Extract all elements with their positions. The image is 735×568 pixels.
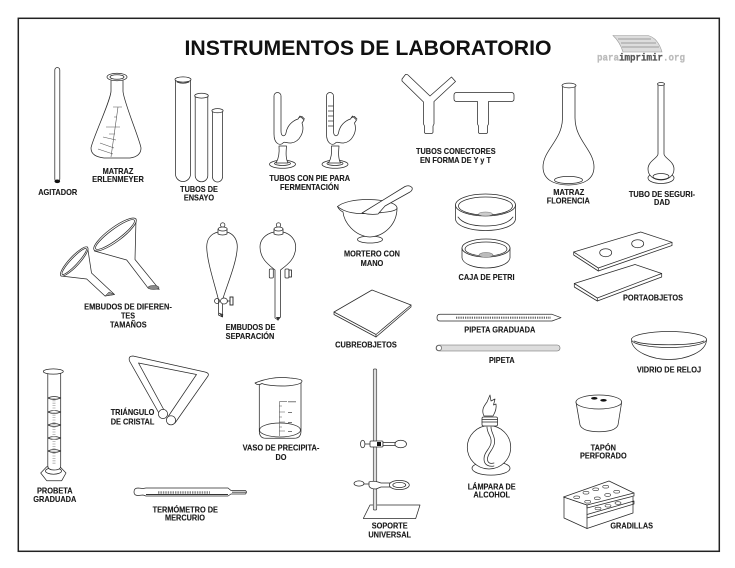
icon: glass triangle bbox=[129, 356, 208, 425]
label: TUBO DE SEGURI- bbox=[629, 189, 695, 199]
icon: thermometer bbox=[134, 488, 246, 496]
label: FLORENCIA bbox=[547, 196, 590, 206]
label: PIPETA GRADUADA bbox=[464, 324, 535, 334]
label: MERCURIO bbox=[165, 513, 205, 523]
icon: test tube rack bbox=[564, 481, 634, 528]
icon: concave slide bbox=[574, 232, 672, 271]
label bbox=[226, 322, 276, 341]
icon: large petri dish bbox=[456, 194, 516, 230]
label: TERMÓMETRO DE bbox=[153, 503, 218, 514]
icon: pipette bbox=[436, 345, 560, 351]
icon: stirring rod bbox=[54, 68, 60, 183]
label bbox=[344, 249, 400, 268]
label bbox=[368, 520, 411, 539]
icon: test tubes bbox=[175, 77, 223, 182]
instrument: agitador bbox=[38, 68, 77, 197]
label: TRIÁNGULO bbox=[111, 407, 155, 417]
label: MORTERO CON bbox=[344, 249, 400, 259]
label: ERLENMEYER bbox=[92, 174, 144, 184]
label: EMBUDOS DE bbox=[226, 322, 276, 332]
instrument: pipeta bbox=[436, 345, 560, 365]
icon: globe separatory funnel bbox=[260, 223, 296, 321]
instrument: matraz florencia bbox=[543, 83, 594, 206]
label: VIDRIO DE RELOJ bbox=[637, 365, 701, 375]
instrument: soporte universal bbox=[354, 369, 420, 539]
icon: pear separatory funnel bbox=[207, 223, 237, 317]
instrument: tubo de seguridad bbox=[629, 82, 695, 207]
label: EMBUDOS DE DIFEREN- bbox=[84, 301, 172, 311]
instrument: gradillas bbox=[564, 481, 653, 530]
label: VASO DE PRECIPITA- bbox=[243, 443, 319, 453]
icon: retort stand bbox=[354, 369, 420, 518]
instrument: triangulo de cristal bbox=[111, 356, 208, 426]
label: TUBOS DE bbox=[180, 184, 218, 194]
instrument: vaso de precipitado bbox=[243, 378, 319, 462]
icon: T connector bbox=[454, 92, 514, 134]
label: FERMENTACIÓN bbox=[280, 181, 339, 192]
label bbox=[180, 184, 218, 202]
label bbox=[33, 486, 76, 504]
instrument: lampara de alcohol bbox=[467, 395, 516, 500]
instrument: matraz erlenmeyer bbox=[91, 73, 144, 184]
logo: paraimprimir.org bbox=[597, 36, 685, 64]
instrument: termometro de mercurio bbox=[134, 488, 246, 523]
instrument: pipeta graduada bbox=[437, 314, 561, 334]
label: PERFORADO bbox=[580, 451, 627, 461]
label: DE CRISTAL bbox=[111, 416, 154, 426]
label: PIPETA bbox=[489, 355, 515, 365]
icon: fermentation tube plain bbox=[270, 93, 304, 168]
label bbox=[629, 189, 695, 207]
icon: perforated stopper bbox=[576, 395, 622, 432]
instrument: cubreobjetos bbox=[334, 290, 411, 350]
label: DAD bbox=[654, 197, 670, 207]
icon: erlenmeyer flask bbox=[91, 73, 141, 158]
label: AGITADOR bbox=[38, 187, 77, 197]
icon: safety tube bbox=[648, 82, 674, 184]
label: GRADUADA bbox=[33, 494, 76, 504]
label: MATRAZ bbox=[553, 187, 584, 197]
instrument: embudos bbox=[57, 213, 172, 329]
instrument: vidrio de reloj bbox=[632, 332, 706, 375]
label: SOPORTE bbox=[372, 520, 408, 530]
icon: beaker bbox=[255, 378, 302, 438]
icon: cover slip bbox=[334, 290, 411, 337]
icon: florence flask bbox=[543, 83, 594, 185]
instrument: caja de petri bbox=[456, 194, 516, 282]
instrument: mortero con mano bbox=[338, 186, 412, 268]
label: CAJA DE PETRI bbox=[458, 272, 514, 282]
label: SEPARACIÓN bbox=[226, 330, 274, 341]
label bbox=[269, 173, 350, 192]
icon: large funnel bbox=[90, 213, 159, 290]
icon: mortar and pestle bbox=[338, 186, 412, 243]
label bbox=[547, 187, 590, 206]
label: EN FORMA DE Y y T bbox=[420, 155, 492, 165]
icon: small funnel bbox=[57, 244, 114, 296]
icon: flat slide bbox=[574, 264, 662, 301]
label: MATRAZ bbox=[103, 166, 133, 176]
label: PORTAOBJETOS bbox=[623, 292, 683, 302]
label: UNIVERSAL bbox=[368, 529, 411, 539]
label: GRADILLAS bbox=[610, 520, 653, 530]
icon: alcohol lamp bbox=[467, 395, 511, 475]
label: CUBREOBJETOS bbox=[335, 340, 397, 350]
label: TES bbox=[121, 310, 135, 320]
label: TUBOS CON PIE PARA bbox=[269, 173, 350, 183]
label bbox=[84, 301, 172, 329]
label: TUBOS CONECTORES bbox=[416, 146, 496, 156]
instrument: embudos de separacion bbox=[207, 223, 296, 341]
label bbox=[580, 441, 627, 461]
instrument: portaobjetos bbox=[574, 232, 683, 302]
instrument: tapon perforado bbox=[576, 395, 627, 461]
label: TAPÓN bbox=[591, 441, 616, 452]
label: PROBETA bbox=[37, 486, 73, 496]
instrument: tubos conectores bbox=[402, 74, 514, 165]
icon: graduated pipette bbox=[437, 314, 561, 321]
label: DO bbox=[276, 452, 287, 462]
instrument: tubos con pie para fermentacion bbox=[269, 93, 357, 192]
instrument: probeta graduada bbox=[33, 369, 76, 504]
icon: Y connector bbox=[402, 74, 456, 134]
label: MANO bbox=[361, 258, 384, 268]
label bbox=[416, 146, 496, 165]
label: ENSAYO bbox=[184, 192, 214, 202]
icon: watch glass bbox=[632, 332, 706, 360]
title: INSTRUMENTOS DE LABORATORIO bbox=[184, 37, 552, 60]
icon: small petri dish bbox=[462, 239, 510, 268]
label bbox=[243, 443, 319, 462]
label: ALCOHOL bbox=[473, 490, 510, 500]
instrument: tubos de ensayo bbox=[175, 77, 223, 202]
label: TAMAÑOS bbox=[110, 319, 147, 329]
icon: graduated cylinder bbox=[41, 369, 66, 481]
label bbox=[111, 407, 155, 426]
icon: fermentation tube graduated bbox=[322, 93, 357, 168]
label: LÁMPARA DE bbox=[468, 481, 516, 491]
label bbox=[468, 481, 516, 500]
label bbox=[92, 166, 144, 184]
label bbox=[153, 503, 218, 523]
logo: paraimprimir.org: paraimprimir.org bbox=[597, 52, 685, 64]
